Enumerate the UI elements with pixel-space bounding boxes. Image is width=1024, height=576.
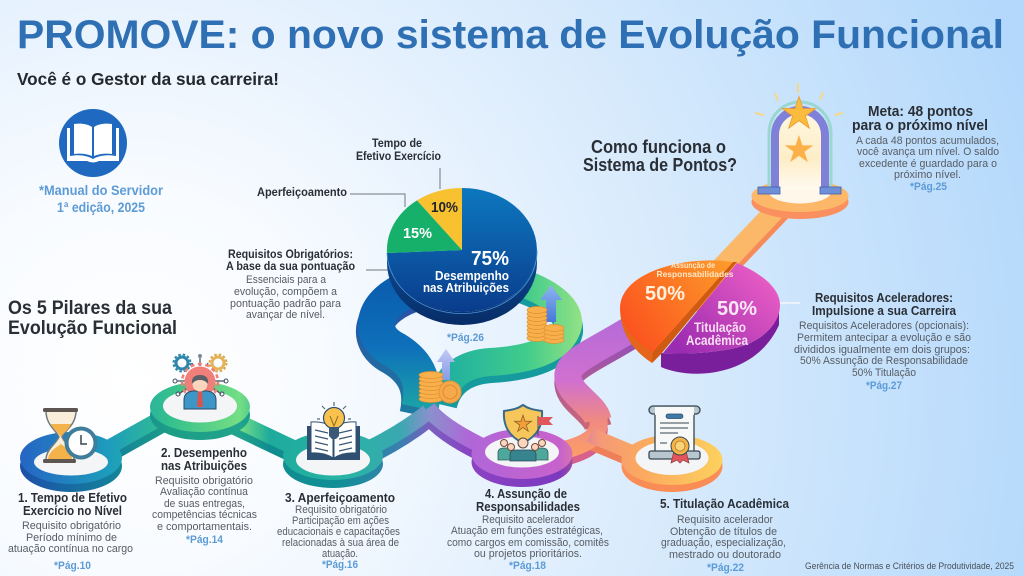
pie values: Responsabilidades bbox=[656, 269, 734, 279]
text block: requisitos obrigatórios: A base da sua pontuação bbox=[226, 259, 355, 273]
title: PROMOVE: o novo sistema de Evolução Funcional bbox=[17, 13, 1004, 57]
slice: 75% desempenho bbox=[387, 188, 537, 312]
text block: requisitos obrigatórios bbox=[226, 247, 355, 321]
coins and arrow: left bbox=[419, 349, 461, 403]
text block: pilar 2 bbox=[152, 445, 257, 546]
pie values: Acadêmica bbox=[686, 333, 748, 348]
icon: hourglass and clock bbox=[43, 408, 98, 463]
road: green curve bbox=[442, 282, 569, 405]
text block: pilar 4: Requisito acelerador bbox=[482, 514, 574, 526]
pie values: 50% bbox=[717, 298, 757, 320]
text block: pilar 2: *Pág.14 bbox=[186, 534, 224, 546]
text block: meta 48 pontos: para o próximo nível bbox=[852, 117, 988, 134]
heading: 5 pilares bbox=[8, 297, 177, 339]
text block: meta 48 pontos: você avança um nível. O saldo bbox=[857, 146, 999, 158]
slice: 10% tempo de exercício bbox=[417, 188, 462, 250]
text block: pilar 2: Requisito obrigatório bbox=[155, 475, 253, 487]
pie values: 10% bbox=[431, 200, 458, 216]
text block: requisitos aceleradores: 50% Titulação bbox=[852, 367, 916, 379]
text block: meta 48 pontos: Meta: 48 pontos bbox=[868, 103, 973, 120]
icon: shield, flag and team bbox=[498, 405, 553, 461]
text block: requisitos aceleradores bbox=[794, 290, 971, 392]
node: 4 assunção de responsabilidades bbox=[472, 405, 572, 487]
road: pink curve to accelerator pie bbox=[555, 320, 645, 465]
node: 2 desempenho bbox=[150, 354, 250, 440]
text block: requisitos obrigatórios: pontuação padrão para bbox=[230, 298, 342, 310]
node: 3 aperfeiçoamento bbox=[283, 402, 383, 488]
text block: pilar 4: como cargos em comissão, comitês bbox=[447, 537, 609, 549]
text block: pilar 2: e comportamentais. bbox=[157, 521, 252, 533]
slice: 50% titulação bbox=[661, 263, 780, 374]
text block: pilar 5: Obtenção de títulos de bbox=[670, 526, 777, 538]
pie values: nas Atribuições bbox=[423, 281, 509, 295]
text block: pilar 1 bbox=[8, 490, 133, 572]
text block: pilar 2: 2. Desempenho bbox=[161, 445, 247, 460]
text block: pilar 2: nas Atribuições bbox=[161, 458, 247, 473]
heading: 5 pilares: Os 5 Pilares da sua bbox=[8, 297, 172, 319]
heading: 5 pilares: Evolução Funcional bbox=[8, 317, 177, 339]
text block: pilar 1: Requisito obrigatório bbox=[22, 520, 121, 532]
label: tempo de efetivo exercício: Efetivo Exercício bbox=[356, 151, 441, 163]
pie values bbox=[403, 200, 509, 295]
coins and arrow: right bbox=[527, 285, 564, 344]
label: tempo de efetivo exercício bbox=[356, 138, 441, 163]
manual reference: 1ª edição, 2025 bbox=[57, 200, 145, 215]
icon: book with light bulb bbox=[307, 402, 360, 460]
text block: pilar 5 bbox=[660, 496, 790, 574]
icon: person with gears bbox=[173, 354, 228, 409]
text block: pilar 3: relacionadas à sua área de bbox=[282, 537, 399, 549]
text block: pilar 5: 5. Titulação Acadêmica bbox=[660, 496, 790, 511]
road: orange path to goal bbox=[690, 200, 786, 306]
slice: 15% aperfeiçoamento bbox=[387, 200, 462, 253]
pie chart: accelerator requirements bbox=[620, 260, 780, 374]
text block: requisitos obrigatórios: Requisitos Obrigatórios: bbox=[228, 247, 353, 261]
text block: pilar 3: Requisito obrigatório bbox=[295, 504, 387, 516]
text block: pilar 1: Exercício no Nível bbox=[23, 503, 122, 518]
heading: sistema de pontos bbox=[583, 137, 737, 175]
pie values: Desempenho bbox=[435, 269, 509, 283]
pie values: Assunção de bbox=[671, 260, 715, 270]
text block: meta 48 pontos: próximo nível. bbox=[894, 169, 961, 181]
pie values: 75% bbox=[471, 248, 509, 270]
pie values: Titulação bbox=[694, 320, 746, 335]
text block: pilar 1: Período mínimo de bbox=[26, 532, 117, 544]
road: chain connecting pillars bbox=[95, 408, 500, 465]
text block: pilar 2: Avaliação contínua bbox=[160, 486, 249, 498]
text block: pilar 4: Responsabilidades bbox=[476, 499, 580, 514]
text block: pilar 3: atuação. bbox=[322, 548, 358, 560]
text block: requisitos obrigatórios: avançar de nível. bbox=[246, 309, 325, 321]
heading: sistema de pontos: Como funciona o bbox=[591, 137, 726, 157]
manual reference: *Manual do Servidor bbox=[39, 183, 164, 198]
text block: pilar 5: graduação, especialização, bbox=[661, 537, 786, 549]
text block: pilar 5: Requisito acelerador bbox=[677, 514, 773, 526]
text block: meta 48 pontos: A cada 48 pontos acumulados, bbox=[856, 135, 999, 147]
label: tempo de efetivo exercício: Tempo de bbox=[372, 138, 422, 150]
text block: pilar 2: competências técnicas bbox=[152, 509, 257, 521]
heading: sistema de pontos: Sistema de Pontos? bbox=[583, 155, 737, 175]
text block: pilar 2: de suas entregas, bbox=[164, 498, 245, 510]
icon: diploma bbox=[649, 406, 700, 463]
text block: requisitos aceleradores: Permitem antecipar a evolução e são bbox=[797, 332, 971, 344]
text block: pilar 3 bbox=[277, 490, 400, 571]
text block: requisitos aceleradores: Requisitos Aceleradores: bbox=[815, 290, 953, 305]
text block: meta 48 pontos bbox=[852, 103, 999, 193]
slice: 50% assunção bbox=[620, 260, 737, 363]
leader line: accelerators bbox=[780, 302, 800, 304]
text block: pilar 4: ou projetos prioritários. bbox=[474, 548, 582, 560]
text block: requisitos aceleradores: *Pág.27 bbox=[866, 380, 902, 392]
text block: pilar 4: Atuação em funções estratégicas, bbox=[451, 525, 603, 537]
text block: pilar 4 bbox=[447, 486, 609, 572]
text block: pilar 3: Participação em ações bbox=[292, 515, 389, 527]
pie values: 50% bbox=[645, 283, 685, 305]
text block: pilar 3: educacionais e capacitações bbox=[277, 526, 400, 538]
text block: requisitos obrigatórios: Essenciais para a bbox=[246, 274, 327, 286]
text block: meta 48 pontos: excedente é guardado para o bbox=[859, 158, 997, 170]
text block: requisitos aceleradores: 50% Assunção de Responsabilidade bbox=[800, 355, 968, 367]
text block: meta 48 pontos: *Pág.25 bbox=[910, 181, 947, 193]
text block: pilar 1: 1. Tempo de Efetivo bbox=[18, 490, 127, 505]
road: blue curve to mandatory pie bbox=[374, 285, 422, 415]
leader lines bbox=[350, 168, 440, 270]
text block: pilar 1: *Pág.10 bbox=[54, 560, 91, 572]
text block: requisitos aceleradores: divididos igualmente em dois grupos: bbox=[794, 344, 970, 356]
text block: pilar 4: *Pág.18 bbox=[509, 560, 546, 572]
text block: requisitos aceleradores: Requisitos Aceleradores (opcionais): bbox=[799, 320, 969, 332]
pie values: 15% bbox=[403, 225, 432, 242]
page reference 26: *Pág.26 bbox=[447, 332, 484, 344]
text block: pilar 3: 3. Aperfeiçoamento bbox=[285, 490, 395, 505]
text block: pilar 3: *Pág.16 bbox=[322, 559, 358, 571]
text block: requisitos aceleradores: Impulsione a sua Carreira bbox=[812, 303, 957, 318]
node: 1 tempo de efetivo exercício bbox=[20, 408, 122, 492]
pie chart: mandatory requirements bbox=[387, 188, 537, 325]
text block: pilar 1: atuação contínua no cargo bbox=[8, 543, 133, 555]
text block: requisitos obrigatórios: evolução, compõem a bbox=[234, 286, 338, 298]
pie values bbox=[645, 260, 757, 348]
text block: pilar 5: mestrado ou doutorado bbox=[669, 549, 781, 561]
icon: star arch bbox=[756, 84, 842, 194]
label: aperfeiçoamento: Aperfeiçoamento bbox=[257, 187, 347, 199]
text block: pilar 4: 4. Assunção de bbox=[485, 486, 567, 501]
node: 5 titulação acadêmica bbox=[622, 406, 722, 492]
subtitle: Você é o Gestor da sua carreira! bbox=[17, 69, 279, 89]
icon: manual book bbox=[59, 109, 127, 177]
text block: pilar 5: *Pág.22 bbox=[707, 562, 744, 574]
node: goal 48 pontos bbox=[752, 84, 848, 219]
manual reference bbox=[39, 183, 164, 215]
footer credit: Gerência de Normas e Critérios de Produtividade, 2025 bbox=[805, 561, 1014, 571]
